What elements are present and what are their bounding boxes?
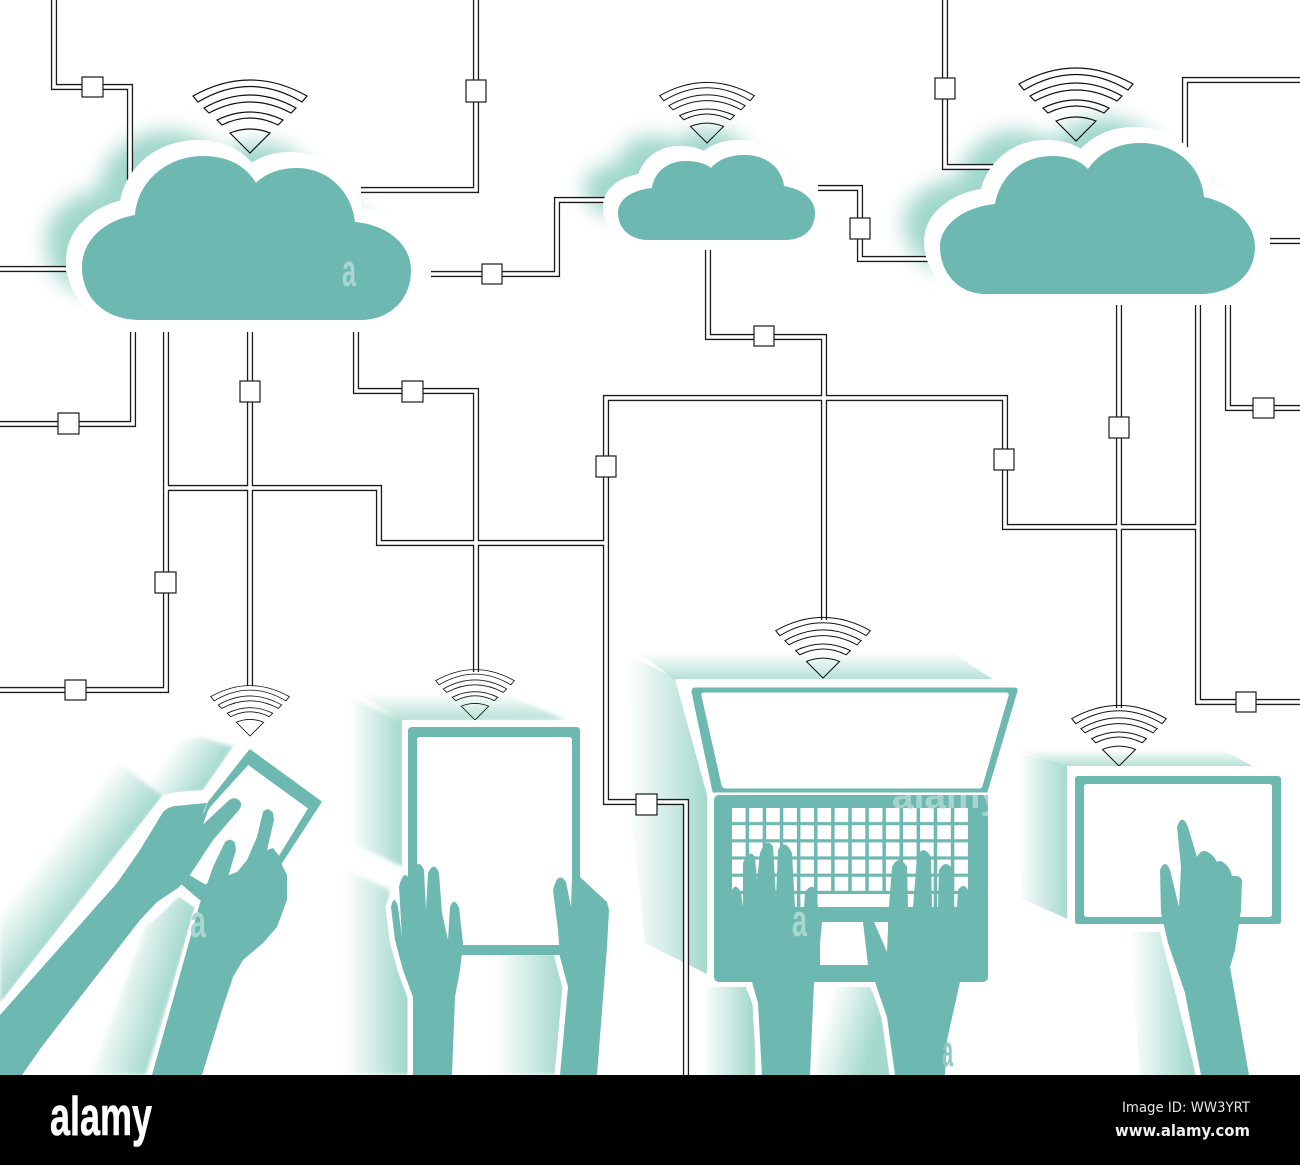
- cloud shadow: right: [904, 118, 1219, 269]
- image id: Image ID: WW3YRT: [1122, 1100, 1250, 1116]
- device: portrait tablet held in two hands: [391, 720, 609, 1075]
- device: phone held in two hands: [0, 745, 320, 1080]
- shadow: landscape tablet: [1015, 750, 1254, 1075]
- logo text: alamy: [50, 1085, 152, 1147]
- wire connectors: [58, 77, 1274, 815]
- icon: wifi above landscape tablet: [1072, 705, 1166, 766]
- keyboard: [732, 808, 971, 907]
- shadow: portrait tablet: [330, 695, 566, 1075]
- icon: wifi above phone: [211, 686, 289, 736]
- watermark letter: a: [190, 896, 207, 947]
- icon: wifi above middle cloud: [660, 82, 754, 143]
- cloud right: [934, 137, 1255, 294]
- icon: wifi above laptop: [776, 617, 870, 678]
- shadow: phone and arms: [0, 737, 234, 1075]
- shadow: laptop: [627, 653, 994, 1075]
- trackpad: [820, 922, 888, 965]
- watermark letter on left cloud: a: [342, 245, 357, 296]
- cloud shadow: middle: [584, 130, 781, 215]
- cloud shadow: left: [46, 131, 375, 295]
- icon: wifi above portrait tablet: [436, 670, 514, 720]
- cloud left: [76, 150, 411, 320]
- icon: wifi above right cloud: [1019, 68, 1133, 141]
- icon: wifi above left cloud: [193, 80, 307, 153]
- laptop screen: [692, 688, 1017, 792]
- cloud middle: [612, 149, 815, 240]
- footer band: [0, 1075, 1300, 1165]
- left hand: [726, 843, 822, 1075]
- watermark ghost text: alamy: [892, 775, 1002, 817]
- right hand: [863, 850, 980, 1075]
- website: www.alamy.com: [1115, 1121, 1250, 1140]
- device: landscape tablet with pointing hand: [1067, 766, 1287, 1075]
- laptop base: [714, 795, 988, 982]
- device: laptop with typing hands: [675, 679, 1030, 1076]
- device: laptop with typing hands: a: [942, 1027, 953, 1076]
- watermark letter: a: [792, 895, 808, 946]
